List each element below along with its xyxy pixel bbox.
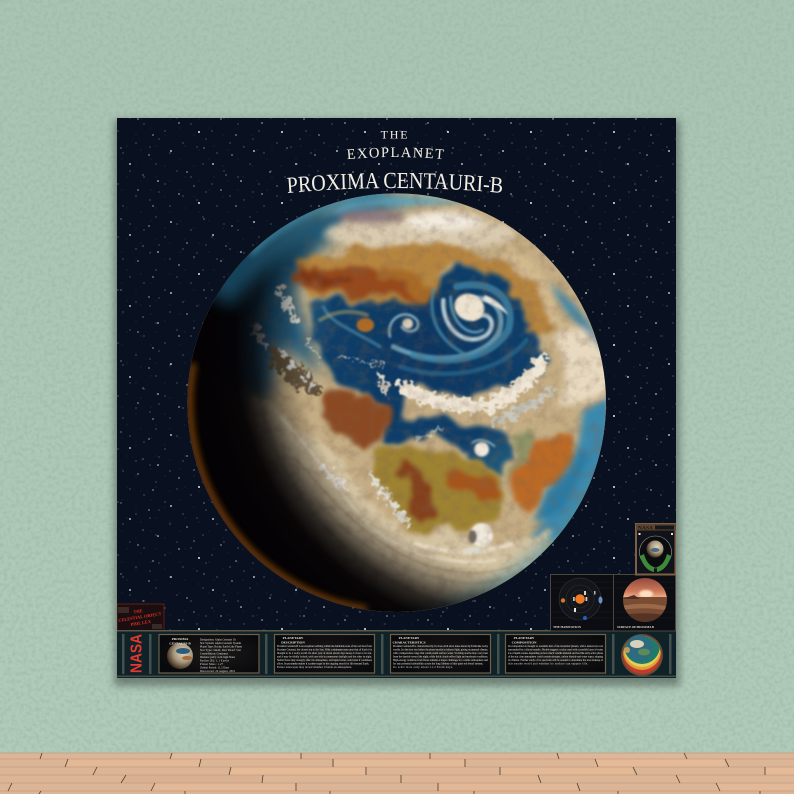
right cream limb and blue ocean: [527, 283, 610, 543]
NASA worm logo: NASA: [128, 634, 146, 673]
panel: planetary characteristics: [390, 634, 490, 673]
panel: planetary characteristics: with a temperature range that could permit surface water. Swirling storms may carry heat: [393, 652, 488, 655]
panel: planetary composition: this nearby world and whether its surface can support life.: [508, 662, 588, 666]
southern eddy clouds: [472, 440, 495, 457]
panel: planetary composition: ice or liquid oceans, depending on how much volatile material survived the early active phase: [508, 652, 604, 655]
wooden floor: [0, 753, 794, 794]
northern desert land: [293, 244, 570, 333]
red celestial object tag: PHIL LEX: [130, 619, 152, 627]
NASA mission emblem: [636, 524, 676, 574]
panel: planetary description: PLANETARY: [283, 636, 304, 640]
southern rust continents: [323, 392, 576, 532]
upper-left dusk atmosphere: [217, 213, 320, 297]
bottom information strip: [117, 628, 676, 678]
panel: Proxima Centauri-B facts: Distance (AU): 4.24 Light Years: [200, 656, 235, 659]
panel: Proxima Centauri-B facts: Designation: Alpha Centauri Cb: [200, 638, 237, 642]
panel: planetary description: [274, 634, 374, 673]
panel: Proxima Centauri-B facts: Discovered: 24 August, 2016: [200, 670, 236, 673]
panel: Proxima Centauri-B facts: Constellation: Centaurus: [200, 652, 228, 656]
panel: planetary description: and it may be tidally locked, with one side in permanent daylight and the other in night.: [277, 656, 372, 658]
panel: planetary composition: its climate. Further study of its spectrum will be needed to determine the true makeup of: [508, 659, 603, 662]
sweep streaks: [280, 417, 530, 583]
surface texture: [261, 194, 606, 598]
title: PROXIMA CENTAURI-B: [286, 172, 502, 193]
continental clouds and mountains: [253, 323, 410, 527]
panel: Proxima Centauri-B facts: PROXIMA: [172, 637, 189, 641]
red celestial object tag: CELESTIAL OBJECT: [118, 611, 162, 623]
panel: planetary characteristics: PLANETARY: [399, 636, 420, 640]
orbiting planets: [561, 591, 602, 620]
panel: Proxima Centauri-B facts: Star Type: Small, Red Dwarf Star: [200, 649, 241, 652]
cyclone swirl: [320, 285, 527, 374]
panel: Proxima Centauri-B facts: Planet Type: Rocky, Earth-Like Planet: [200, 646, 242, 648]
small eddy: [389, 314, 418, 337]
panel: planetary composition: COMPOSITION: [512, 640, 537, 644]
red celestial object tag: THE: [133, 608, 143, 614]
panel: Proxima Centauri-B facts: CENTAURI-B: [169, 642, 191, 646]
terminator shadow: [187, 204, 514, 612]
panel: planetary description: DESCRIPTION: [281, 640, 305, 644]
panel: Proxima Centauri-B facts: Planet Mass: 1.27: [200, 663, 224, 666]
panel: planetary composition: Its composition is thought to resemble that of the terrestrial planets, with a dense iron core: [508, 645, 604, 648]
panel: planetary description: allow. Its proximity makes it a prime target in the ongoing search for life beyond Earth.: [277, 662, 369, 666]
icon: star: [575, 594, 585, 604]
orange limb glow: [190, 363, 367, 609]
icon: mini planet: [167, 643, 193, 669]
panel: Proxima Centauri-B facts: [159, 634, 259, 673]
upper rim glow: [250, 194, 387, 253]
panel: solar system diagram: [550, 574, 614, 631]
panel: planetary composition: [506, 634, 606, 673]
planet illustration: [180, 190, 613, 617]
top polar clouds: [320, 196, 517, 251]
panel: Proxima Centauri-B facts: Radius (R): 1.1 Earths: [200, 660, 229, 662]
panel: planetary description: thought to be a rocky world. Its short year of about eleven days keeps it close to its star,: [277, 652, 372, 655]
panel: planetary description: Future telescopes may reveal whether it holds an atmosphere.: [277, 666, 352, 669]
lower limb cyan haze: [408, 500, 582, 612]
panel: planetary composition: of the star. Any atmosphere could contain nitrogen, carbon dioxide and water vapor, shaping: [508, 656, 604, 658]
panel: planetary description: Proxima Centauri, the closest star to the Sun. With a minimum mass near that of Earth it is: [277, 648, 372, 652]
red celestial object tag: [117, 604, 164, 631]
main ocean: [308, 269, 543, 477]
title: EXOPLANET: [346, 148, 444, 160]
title: [286, 131, 502, 193]
panel: Proxima Centauri-B facts: Orbital Period: 11.2 Days: [200, 666, 229, 670]
panel: solar system diagram: THE HABITATION: [553, 625, 582, 629]
panel: surface of Proxima: SURFACE OF PROXIMA B: [617, 625, 655, 629]
poster drop shadow: [114, 120, 680, 686]
western and southern cream sweep: [253, 397, 557, 610]
panel: planetary description: Proxima Centauri-B is an exoplanet orbiting within the habitable zone of the red dwarf star: [277, 645, 372, 648]
panel: planetary composition: PLANETARY: [514, 636, 535, 640]
panel: planetary characteristics: Its orbit lasts only about 11.2 Earth days.: [393, 666, 453, 669]
panel: Proxima Centauri-B facts: Star System: Alpha Centauri System: [200, 642, 242, 645]
poster: [117, 118, 676, 678]
scattered clouds: [280, 290, 443, 438]
southern storm cloud: [464, 523, 493, 554]
NASA mission emblem: NASA: [638, 526, 653, 532]
panel: planetary characteristics: worlds. Its dim host star bathes the planet mostly in infrared light, giving an unusual climate,: [393, 648, 488, 652]
round mission badge: [621, 634, 663, 676]
upper-left blue atmosphere and western ocean: [238, 194, 415, 402]
panel: surface of Proxima: [614, 574, 676, 631]
panel: planetary characteristics: from the dayside toward the night, while thick clouds reflect light and moderate conditions.: [393, 656, 488, 658]
panel: planetary characteristics: Proxima Centauri-B is characterized by its close orbit and a mass shared by Earth-like rocky: [393, 645, 489, 648]
title: THE: [381, 128, 409, 142]
panel: planetary description: Stellar flares may strongly affect its atmosphere, and liquid water could exist if conditions: [277, 659, 372, 662]
panel: planetary composition: surrounded by a silicate mantle. Models suggest a rocky crust with a possible layer of water: [508, 648, 603, 652]
cyclone eye cloud: [357, 289, 508, 332]
central cloud band: [405, 362, 550, 422]
panel: planetary characteristics: CHARACTERISTICS: [393, 640, 426, 644]
panel: planetary characteristics: High-energy radiation from flares remains a major challenge for a stable atmosphere and: [393, 659, 489, 662]
panel: planetary characteristics: for any potential habitability across the long lifetime of this quiet red dwarf system.: [393, 662, 483, 666]
